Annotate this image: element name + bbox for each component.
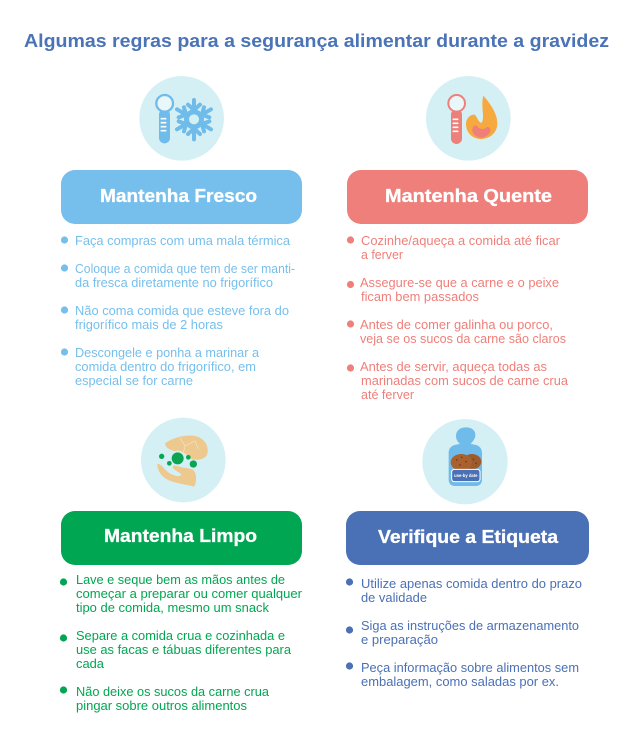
list: check the label rules: e preparação [361,632,438,647]
list: check the label rules [346,576,582,689]
heading bar: Mantenha Limpo: Mantenha Limpo [104,526,257,546]
list: keep hot rules: Cozinhe/aqueça a comida até ficar [361,233,561,248]
list: keep hot rules: marinadas com sucos de carne crua [361,373,569,388]
list: keep hot rules [347,233,569,402]
heading bar: Mantenha Fresco [61,170,302,224]
icon: thermometer and snowflake [139,76,224,161]
list: keep cold rules: comida dentro do frigorífico, em [75,359,256,374]
list: check the label rules: embalagem, como saladas por ex. [361,674,559,689]
list: check the label rules: Utilize apenas comida dentro do prazo [361,576,582,591]
list: check the label rules: Siga as instruções de armazenamento [361,618,579,633]
icon: bag of cookies with label [422,419,508,504]
list: keep clean rules: Não deixe os sucos da carne crua [76,684,270,699]
heading bar: Mantenha Quente: Mantenha Quente [385,186,552,206]
panel: keep clean [60,418,303,713]
list: keep cold rules: frigorífico mais de 2 horas [75,317,223,332]
heading bar: Verifique a Etiqueta: Verifique a Etiqueta [378,527,559,547]
list: keep clean rules: Lave e seque bem as mãos antes de [76,572,285,587]
list: keep clean rules: cada [76,656,105,671]
list: keep cold rules [61,233,295,388]
list: keep cold rules: Coloque a comida que tem de ser manti- [75,261,295,276]
list: keep clean rules [60,572,303,713]
list: keep clean rules: tipo de comida, mesmo um snack [76,600,269,615]
icon: bag of cookies with label: use-by date [454,473,478,479]
panel: check the label [346,419,589,689]
list: keep cold rules: Descongele e ponha a marinar a [75,345,260,360]
icon: hands with dough and germs [141,418,226,502]
list: keep cold rules: da fresca diretamente no frigorífico [75,275,273,290]
list: keep hot rules: ficam bem passados [361,289,479,304]
heading bar: Mantenha Fresco: Mantenha Fresco [100,186,257,206]
panel: keep cold [61,76,302,388]
list: keep clean rules: começar a preparar ou comer qualquer [76,586,303,601]
list: keep cold rules: especial se for carne [75,373,193,388]
list: keep hot rules: a ferver [361,247,404,262]
list: keep clean rules: pingar sobre outros alimentos [76,698,247,713]
heading bar: Verifique a Etiqueta [346,511,589,565]
list: keep clean rules: use as facas e tábuas diferentes para [76,642,292,657]
icon: thermometer and flame [426,76,511,161]
list: check the label rules: Peça informação sobre alimentos sem [361,660,579,675]
list: keep hot rules: até ferver [361,387,415,402]
heading bar: Mantenha Limpo [61,511,302,565]
heading bar: Mantenha Quente [347,170,588,224]
list: keep cold rules: Faça compras com uma mala térmica [75,233,291,248]
title: Algumas regras para a segurança alimentar durante a gravidez [24,31,609,51]
list: keep hot rules: Antes de servir, aqueça todas as [360,359,547,374]
panel: keep hot [347,76,588,402]
list: keep hot rules: veja se os sucos da carne são claros [360,331,566,346]
list: keep cold rules: Não coma comida que esteve fora do [75,303,289,318]
list: check the label rules: de validade [361,590,427,605]
list: keep hot rules: Antes de comer galinha ou porco, [360,317,553,332]
list: keep clean rules: Separe a comida crua e cozinhada e [76,628,285,643]
list: keep hot rules: Assegure-se que a carne e o peixe [360,275,559,290]
